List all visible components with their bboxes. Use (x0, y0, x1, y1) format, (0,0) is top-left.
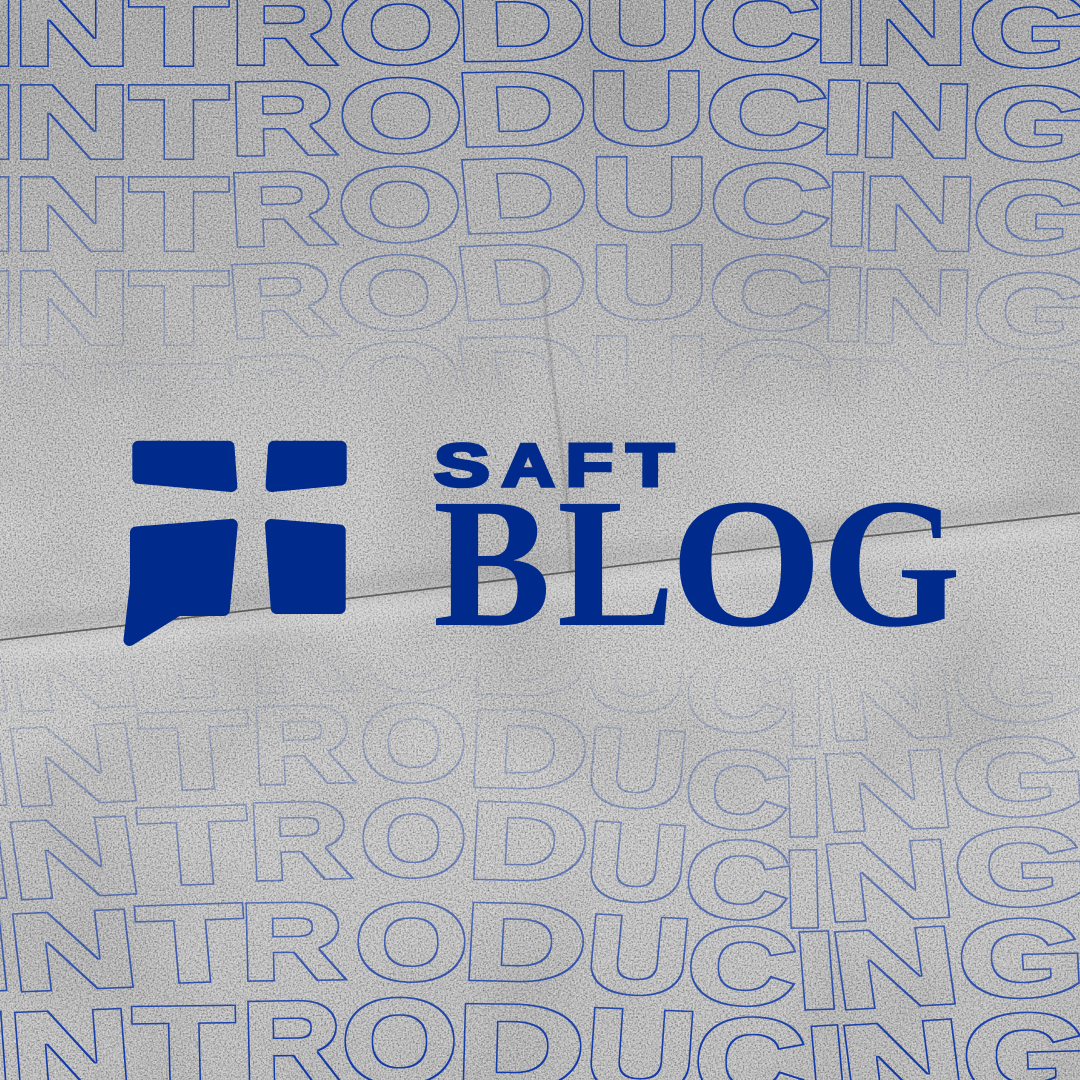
brand wordmark (433, 432, 961, 666)
pattern row 6: G (949, 619, 1080, 744)
pattern row 6: D (467, 595, 594, 718)
icon: bottom-left pane with speech tail (130, 525, 232, 640)
pattern row 5: C (703, 318, 836, 438)
pattern row 4: N (857, 249, 976, 365)
pattern row 2: I (818, 60, 868, 175)
pattern row 3: U (590, 137, 709, 252)
wordmark: SAFT: S (434, 432, 490, 499)
pattern row 8 (0, 797, 1080, 929)
pattern row 5: N (857, 341, 976, 457)
pattern row 9: N (3, 887, 144, 1013)
pattern row 3: R (225, 150, 338, 268)
pattern row 5: I (819, 339, 869, 454)
pattern row 6: C (680, 630, 796, 755)
pattern row 4: U (590, 225, 709, 340)
pattern row 8: G (949, 804, 1080, 929)
pattern row 4: T (130, 251, 228, 366)
pattern row 1 (0, 0, 1080, 69)
wordmark: BLOG: B (433, 461, 551, 666)
pattern row 3: C (705, 142, 835, 261)
pattern row 6: U (581, 609, 694, 734)
pattern row 6: R (246, 592, 354, 714)
pattern row 9: T (134, 881, 249, 1005)
pattern row 4: I (819, 247, 869, 362)
icon: top-left pane (138, 447, 231, 486)
pattern row 4: D (450, 221, 594, 342)
pattern row 4: O (331, 233, 467, 353)
pattern row 2: N (13, 65, 131, 180)
wordmark: SAFT: A (502, 432, 555, 499)
pattern row 8: U (581, 799, 694, 924)
pattern row 9: U (581, 892, 697, 1018)
pattern row 10 (0, 996, 1080, 1080)
logo icon: speech bubble with cross (130, 447, 341, 640)
pattern row 9: C (683, 904, 801, 1028)
pattern row 2: R (228, 61, 337, 177)
pattern row 7: N (816, 727, 959, 854)
pattern row 3: T (130, 157, 228, 272)
pattern row 7 (0, 702, 1080, 838)
pattern row 9: I (790, 909, 844, 1031)
pattern row 6: O (362, 592, 469, 712)
pattern row 8: T (136, 783, 253, 907)
pattern row 8: C (680, 817, 796, 942)
pattern row 4: C (703, 233, 836, 353)
pattern row 9 (0, 901, 1080, 1011)
pattern row 4: R (223, 241, 338, 360)
pattern row 3: N (13, 157, 131, 272)
wordmark: BLOG: G (822, 461, 961, 666)
pattern row 7: D (465, 688, 592, 811)
pattern row 7: C (680, 727, 796, 852)
icon: bottom-right pane (271, 525, 340, 608)
pattern row 2: N (857, 63, 976, 179)
pattern row 9: R (239, 881, 345, 1002)
pattern row 8: D (465, 780, 592, 903)
pattern row 7: N (0, 700, 148, 828)
pattern row 3: O (333, 145, 466, 264)
pattern row 2: D (453, 50, 591, 168)
pattern row 4: N (13, 251, 131, 366)
pattern row 8: N (0, 793, 148, 921)
pattern row 3 (0, 156, 1080, 257)
wordmark: SAFT: F (565, 432, 613, 499)
pattern row 7: U (581, 705, 694, 830)
pattern row 9: N (825, 904, 966, 1031)
pattern row 5: T (130, 344, 228, 459)
pattern row 5 (0, 335, 1080, 388)
pattern row 5: O (331, 320, 467, 440)
pattern row 2: C (703, 54, 830, 171)
pattern row 5: D (450, 313, 594, 434)
pattern row 7: T (137, 688, 254, 812)
pattern row 3: N (860, 156, 979, 272)
wordmark: BLOG: L (557, 461, 675, 666)
pattern row 7: I (781, 737, 825, 858)
pattern row 9: O (355, 882, 468, 1002)
pattern row 8: N (817, 817, 960, 944)
pattern row 7: O (360, 683, 467, 803)
pattern row 2: T (130, 65, 228, 180)
pattern row 8: R (245, 779, 353, 902)
pattern row 6: T (137, 596, 254, 720)
wordmark: SAFT: T (626, 432, 674, 499)
pattern row 5: R (220, 333, 339, 453)
icon: top-right pane (272, 447, 341, 486)
pattern row 5: N (13, 344, 131, 459)
pattern row 7: G (947, 714, 1080, 839)
wordmark: BLOG: O (670, 461, 822, 666)
pattern row 6: N (818, 636, 961, 763)
pattern row 2: O (336, 57, 466, 175)
pattern row 6: N (0, 605, 148, 733)
pattern row 9: D (460, 881, 590, 1004)
pattern row 4 (0, 244, 1080, 350)
pattern row 3: D (453, 135, 593, 255)
pattern row 8: O (360, 778, 467, 898)
pattern row 8: I (781, 828, 826, 949)
pattern row 3: I (822, 152, 872, 267)
pattern row 6 (0, 664, 1080, 747)
pattern row 6: I (783, 646, 828, 767)
pattern row 2 (0, 70, 1080, 163)
pattern row 7: R (248, 684, 356, 806)
pattern row 2: U (587, 51, 706, 166)
pattern row 5: U (590, 316, 709, 431)
